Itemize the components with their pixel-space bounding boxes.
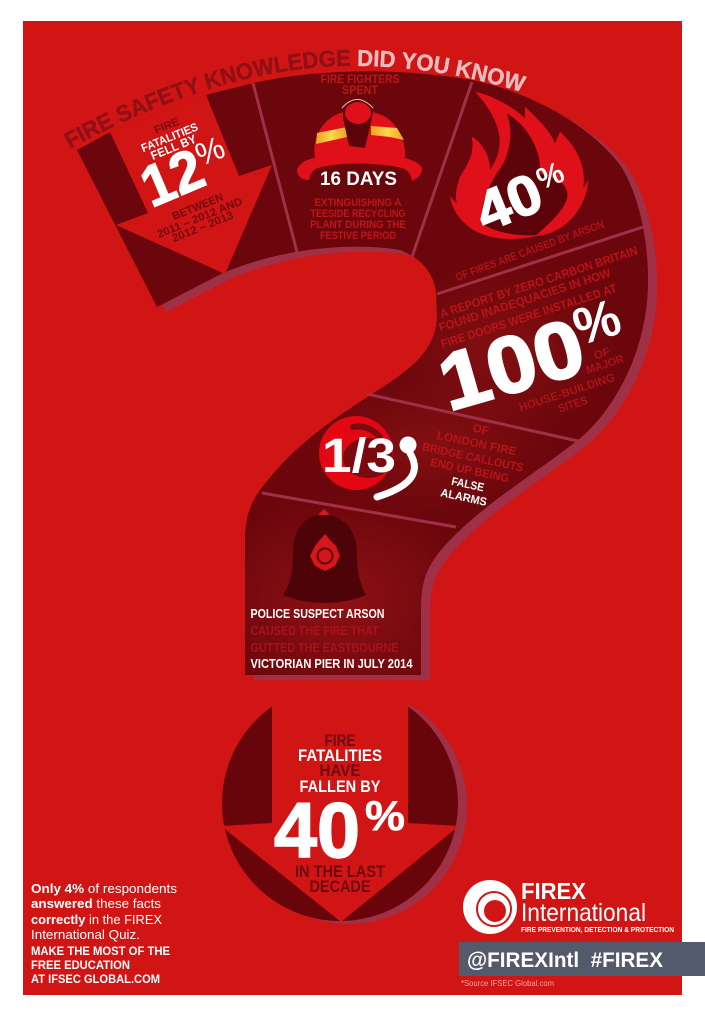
arrow shape xyxy=(221,680,459,922)
quiz text block: International Quiz. xyxy=(31,927,140,942)
fire fighters spent label xyxy=(320,74,400,97)
panel: 100% report xyxy=(429,244,639,427)
logo: firex international: International xyxy=(521,899,646,927)
panel: question mark dot, fatalities fallen 40% xyxy=(221,680,467,924)
callouts text: ALARMS xyxy=(439,487,488,509)
panel: police suspect arson xyxy=(250,509,413,671)
arrow text: 40 xyxy=(274,786,360,874)
report text: FOUND INADEQUACIES IN HOW xyxy=(437,266,613,335)
panel: 40% arson xyxy=(450,92,606,284)
panel: 1/3 false alarms xyxy=(319,416,525,509)
sites text: SITES xyxy=(557,395,589,415)
arrow text: 2012 – 2013 xyxy=(170,209,235,245)
fire fighters spent label: SPENT xyxy=(342,85,378,97)
arrow text: IN THE LAST xyxy=(295,862,386,881)
arrow text: DECADE xyxy=(310,877,370,896)
quiz text block: Only 4% of respondents xyxy=(31,881,178,896)
100 percent: % xyxy=(566,288,628,357)
sites text: MAJOR xyxy=(585,353,626,377)
40 percent: 40 xyxy=(466,160,551,243)
report text xyxy=(437,244,639,351)
arrow text xyxy=(274,731,405,896)
quiz text block: FREE EDUCATION xyxy=(31,958,130,972)
panel: firefighters 16 days xyxy=(297,74,422,242)
arrow text: FALLEN BY xyxy=(300,777,381,796)
description: PLANT DURING THE xyxy=(310,219,406,231)
report text: A REPORT BY ZERO CARBON BRITAIN xyxy=(438,244,639,321)
description: TEESIDE RECYCLING xyxy=(310,208,406,220)
quiz text block: MAKE THE MOST OF THE xyxy=(31,944,170,958)
report text: FIRE DOORS WERE INSTALLED AT xyxy=(439,281,619,351)
16 days: 16 DAYS xyxy=(320,169,397,190)
panel: fatalities fell 12% xyxy=(110,95,272,274)
arrow text: BETWEEN xyxy=(171,192,225,223)
arrow shape xyxy=(110,95,272,274)
source note: *Source IFSEC Global.com xyxy=(461,978,554,988)
icon: logo rings xyxy=(463,880,517,934)
quiz text block xyxy=(31,881,178,986)
1/3: 1/3 xyxy=(322,430,396,483)
logo: firex international: FIREX xyxy=(521,878,587,904)
callouts text: BRIDGE CALLOUTS xyxy=(421,441,525,475)
callouts text: END UP BEING xyxy=(429,457,510,485)
fire fighters spent label: FIRE FIGHTERS xyxy=(320,74,400,86)
arrow text: FATALITIES xyxy=(140,121,200,155)
description: EXTINGUISHING A xyxy=(314,197,402,209)
arrow text: 12 xyxy=(131,136,214,220)
arrow text: HAVE xyxy=(320,761,360,780)
arson text: CAUSED THE FIRE THAT xyxy=(250,623,379,638)
callouts text: FALSE xyxy=(450,476,485,494)
description: FESTIVE PERIOD xyxy=(320,230,396,242)
arson text: GUTTED THE EASTBOURNE xyxy=(250,640,399,655)
arrow text: FIRE xyxy=(324,731,356,750)
icon: fire helmet xyxy=(297,100,422,181)
quiz text block: correctly in the FIREX xyxy=(31,912,162,927)
icon: alarm circle xyxy=(319,416,416,497)
quiz text block: AT IFSEC GLOBAL.COM xyxy=(31,972,160,986)
arrow text: FELL BY xyxy=(149,132,198,163)
description xyxy=(310,197,406,242)
40 percent: % xyxy=(532,156,569,196)
arrow text: 2011 – 2012 AND xyxy=(155,196,244,241)
arson text: POLICE SUSPECT ARSON xyxy=(250,606,384,621)
sites text: HOUSE-BUILDING xyxy=(518,372,617,414)
callouts text: OF xyxy=(472,423,490,438)
logo: firex international: FIRE PREVENTION, DETECTION & PROTECTION xyxy=(521,927,674,934)
arson text xyxy=(250,606,413,671)
arrow text: % xyxy=(190,129,230,173)
icon: police helmet xyxy=(283,509,366,603)
logo: firex international xyxy=(463,878,674,934)
sites text xyxy=(518,346,626,415)
icon: flame xyxy=(450,92,588,239)
arrow text: FIRE xyxy=(153,116,181,137)
callouts text xyxy=(421,423,525,509)
arson text: VICTORIAN PIER IN JULY 2014 xyxy=(250,656,413,671)
heading: fire safety knowledge did you know: FIRE SAFETY KNOWLEDGE DID YOU KNOW xyxy=(64,50,527,148)
100 percent: 100 xyxy=(429,302,594,427)
arrow text xyxy=(131,116,244,245)
sites text: OF xyxy=(593,346,612,362)
social media bar: @FIREXIntl #FIREX xyxy=(467,949,663,972)
arrow text: FATALITIES xyxy=(298,746,382,765)
question mark stem shape xyxy=(77,71,657,710)
arrow text: % xyxy=(365,792,405,839)
caption: OF FIRES ARE CAUSED BY ARSON xyxy=(454,219,606,284)
100 percent xyxy=(429,288,628,427)
social media bar xyxy=(459,942,705,976)
callouts text: LONDON FIRE xyxy=(436,430,518,458)
quiz text block: answered these facts xyxy=(31,896,162,911)
